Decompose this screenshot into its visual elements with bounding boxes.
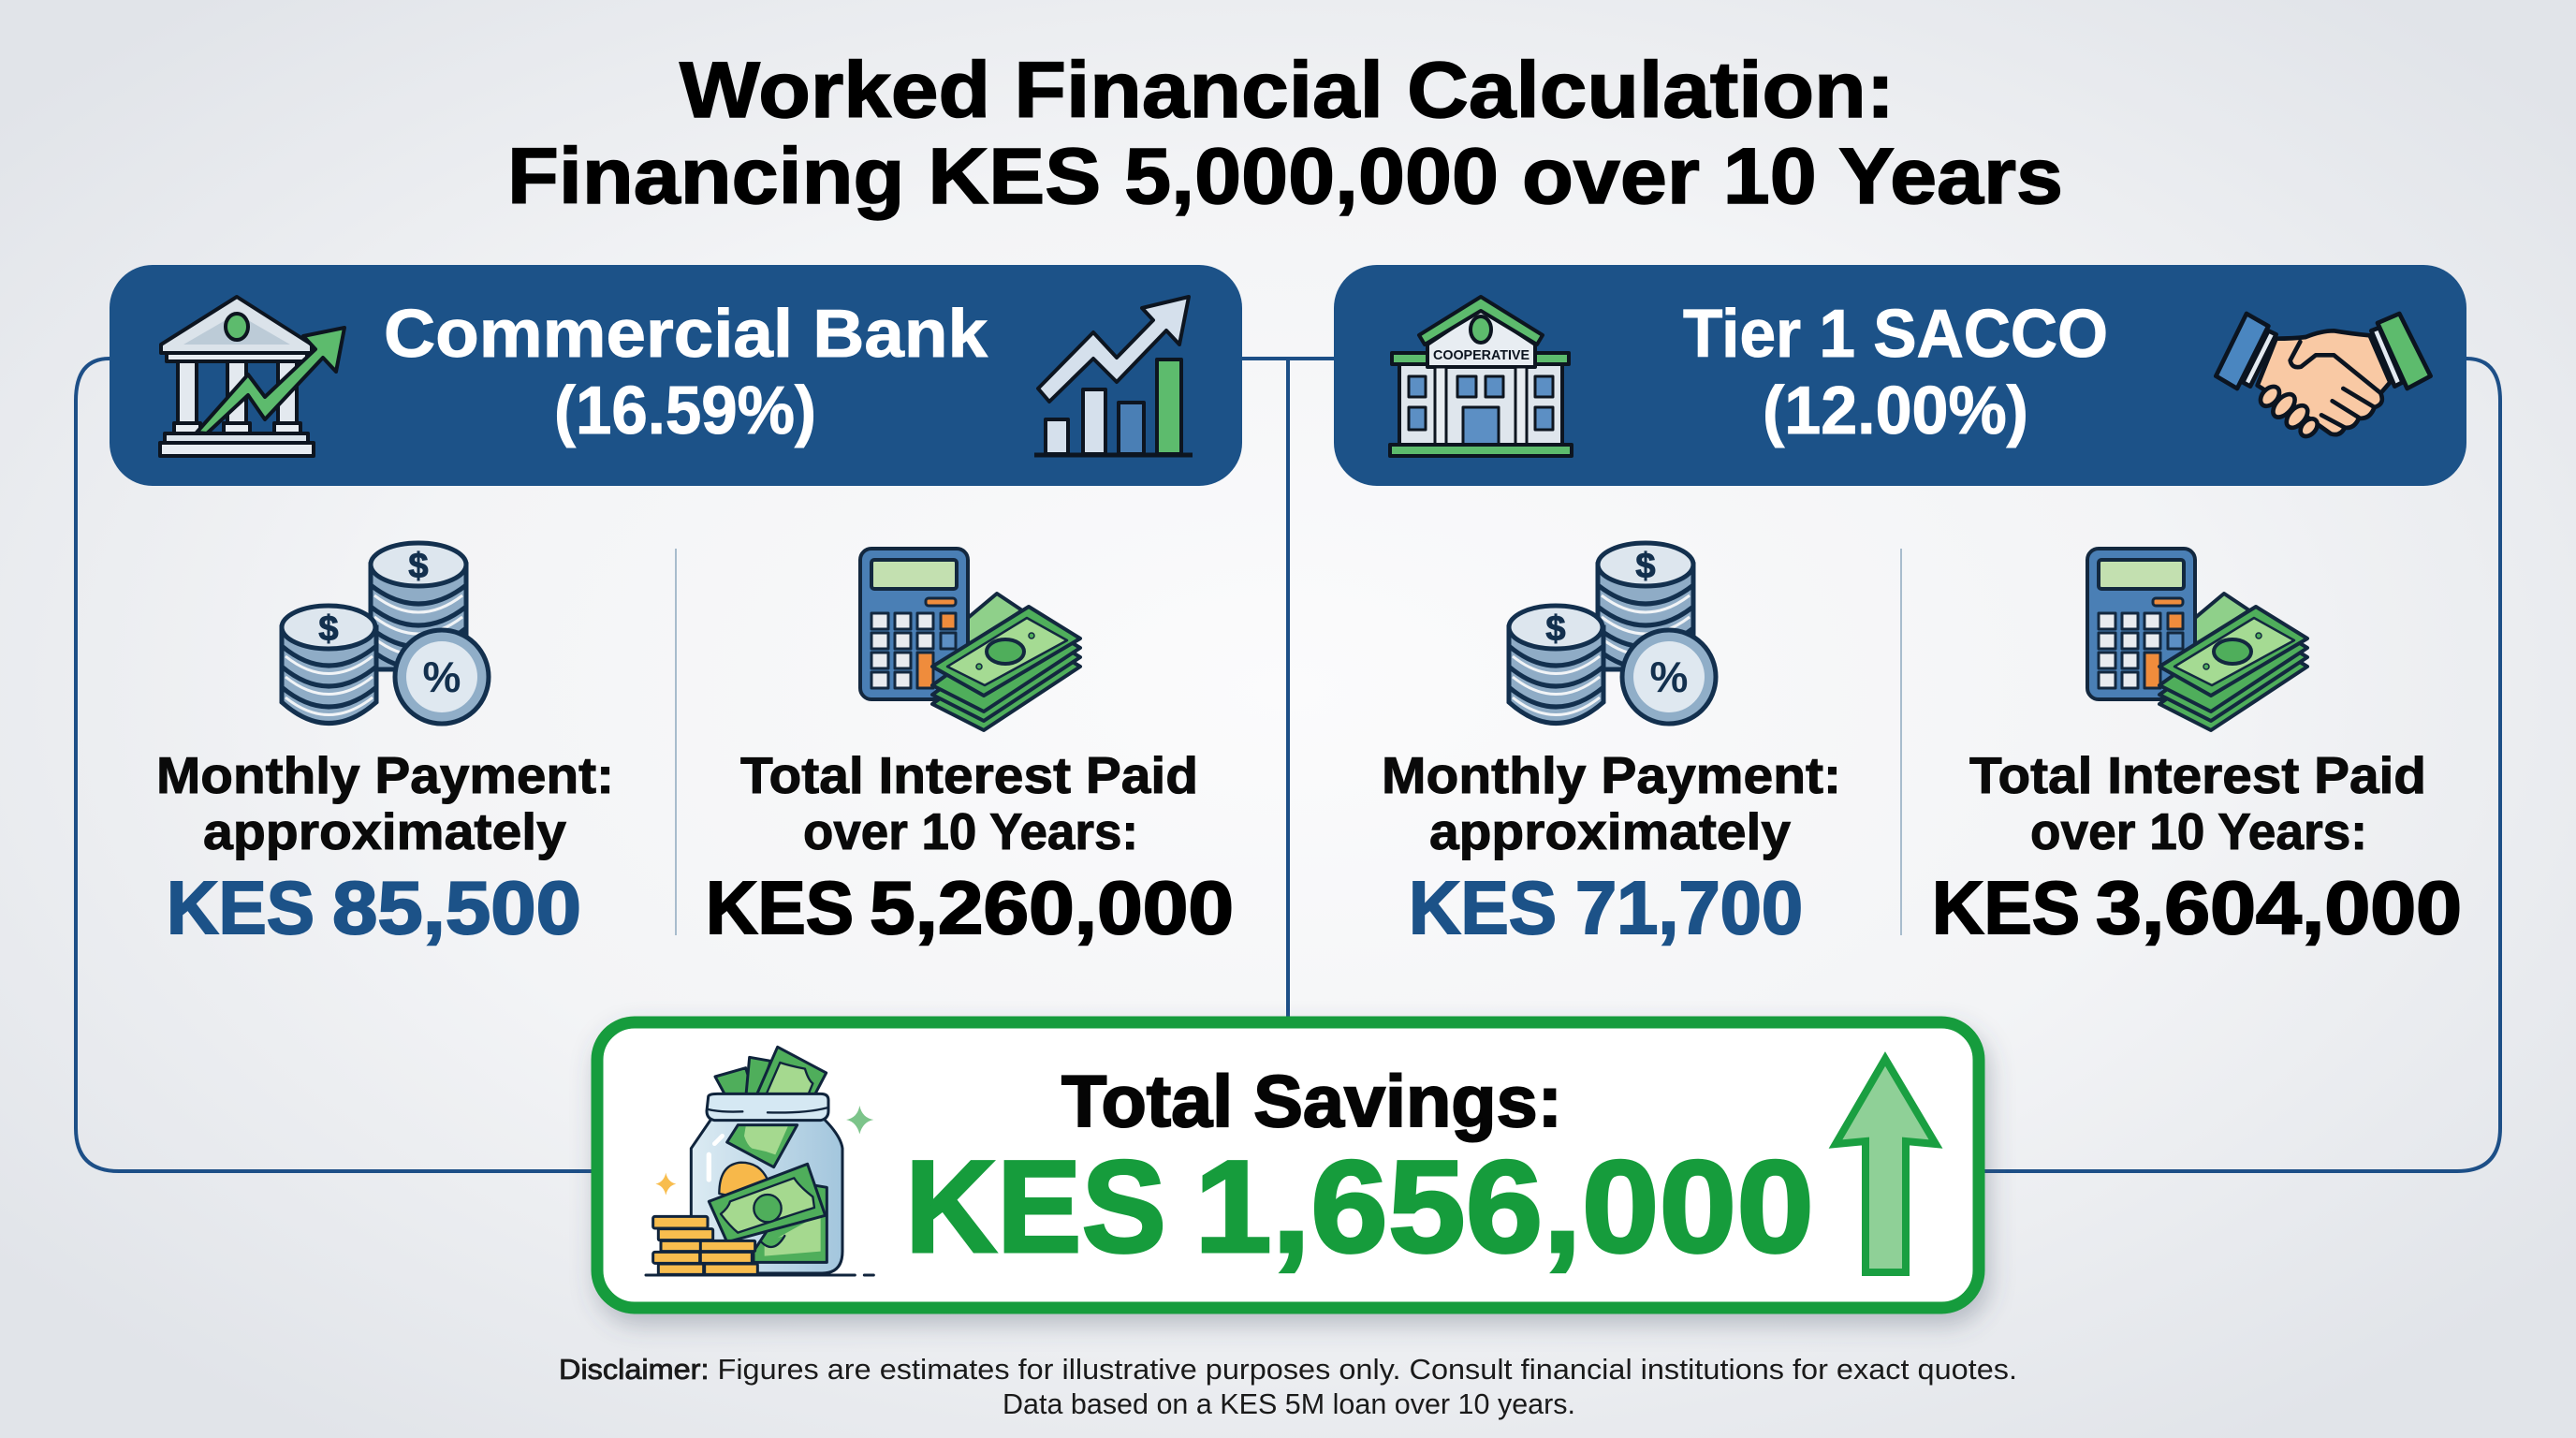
icon: coin stacks with percent: % xyxy=(423,653,461,701)
text: monthly payment: KES xyxy=(167,866,315,949)
connector lines xyxy=(76,359,2500,1171)
divider xyxy=(1900,549,1902,935)
text: total interest: Total Interest Paid xyxy=(740,746,1198,804)
icon: calculator with cash xyxy=(2087,549,2307,730)
savings box xyxy=(597,1022,1979,1308)
panel: total savings xyxy=(597,1022,1979,1308)
text: total interest: 5,260,000 xyxy=(870,866,1234,949)
icon: coin stacks with percent xyxy=(1509,543,1716,724)
header: tier 1 sacco xyxy=(1334,265,2466,486)
text: total savings value: 1,656,000 xyxy=(1194,1133,1814,1280)
icon: bank building with arrow xyxy=(160,297,344,456)
icon: green up arrow xyxy=(1836,1059,1936,1272)
icon: growth chart xyxy=(1034,297,1193,455)
panel: tier 1 sacco xyxy=(1334,265,2466,949)
icon: calculator with cash xyxy=(860,549,1080,730)
title: Financing KES 5,000,000 over 10 Years xyxy=(507,132,2063,220)
icon: cooperative building: COOPERATIVE xyxy=(1433,347,1530,363)
icon: cooperative building xyxy=(1390,297,1572,456)
text: monthly payment: Monthly Payment: xyxy=(1382,746,1841,804)
icon: coin stacks with percent: $ xyxy=(1545,609,1566,649)
header: tier 1 sacco: Tier 1 SACCO xyxy=(1683,297,2108,372)
panel: commercial bank xyxy=(110,265,1242,949)
text: total interest: 3,604,000 xyxy=(2096,866,2462,949)
text: total savings value: KES xyxy=(905,1133,1166,1280)
header: commercial bank xyxy=(110,265,1242,486)
text: monthly payment: KES xyxy=(1409,866,1557,949)
icon: coin stacks with percent: $ xyxy=(408,547,429,586)
text: total interest: over 10 Years: xyxy=(2030,802,2367,860)
divider xyxy=(675,549,677,935)
text: monthly payment: 71,700 xyxy=(1575,866,1803,949)
text: monthly payment: approximately xyxy=(203,802,566,860)
text: total savings label: Total Savings: xyxy=(1061,1060,1562,1142)
icon: coin stacks with percent: % xyxy=(1650,653,1688,701)
disclaimer: Data based on a KES 5M loan over 10 years. xyxy=(1003,1388,1575,1420)
title: Worked Financial Calculation: xyxy=(680,46,1895,134)
header: commercial bank: (16.59%) xyxy=(554,374,816,448)
text: monthly payment: Monthly Payment: xyxy=(156,746,614,804)
header: tier 1 sacco: (12.00%) xyxy=(1763,374,2028,448)
text: monthly payment: 85,500 xyxy=(332,866,581,949)
icon: coin stacks with percent: $ xyxy=(1635,547,1656,586)
text: total interest: Total Interest Paid xyxy=(1969,746,2426,804)
title xyxy=(507,46,2063,220)
icon: coin stacks with percent: $ xyxy=(318,609,339,649)
text: monthly payment xyxy=(156,746,614,949)
text: total interest: KES xyxy=(1932,866,2080,949)
text: total interest: over 10 Years: xyxy=(803,802,1138,860)
icon: coin stacks with percent xyxy=(282,543,489,724)
disclaimer xyxy=(559,1354,2017,1420)
text: total interest xyxy=(1932,746,2462,949)
icon: handshake xyxy=(2216,314,2431,439)
icon: money jar xyxy=(646,1047,873,1275)
text: monthly payment: approximately xyxy=(1429,802,1791,860)
disclaimer: Disclaimer: Figures are estimates for illustrative purposes only. Consult financial institutions for exact quotes. xyxy=(559,1354,2017,1386)
header: commercial bank: Commercial Bank xyxy=(384,297,988,372)
text: total interest xyxy=(706,746,1234,949)
text: total interest: KES xyxy=(706,866,854,949)
text: monthly payment xyxy=(1382,746,1841,949)
